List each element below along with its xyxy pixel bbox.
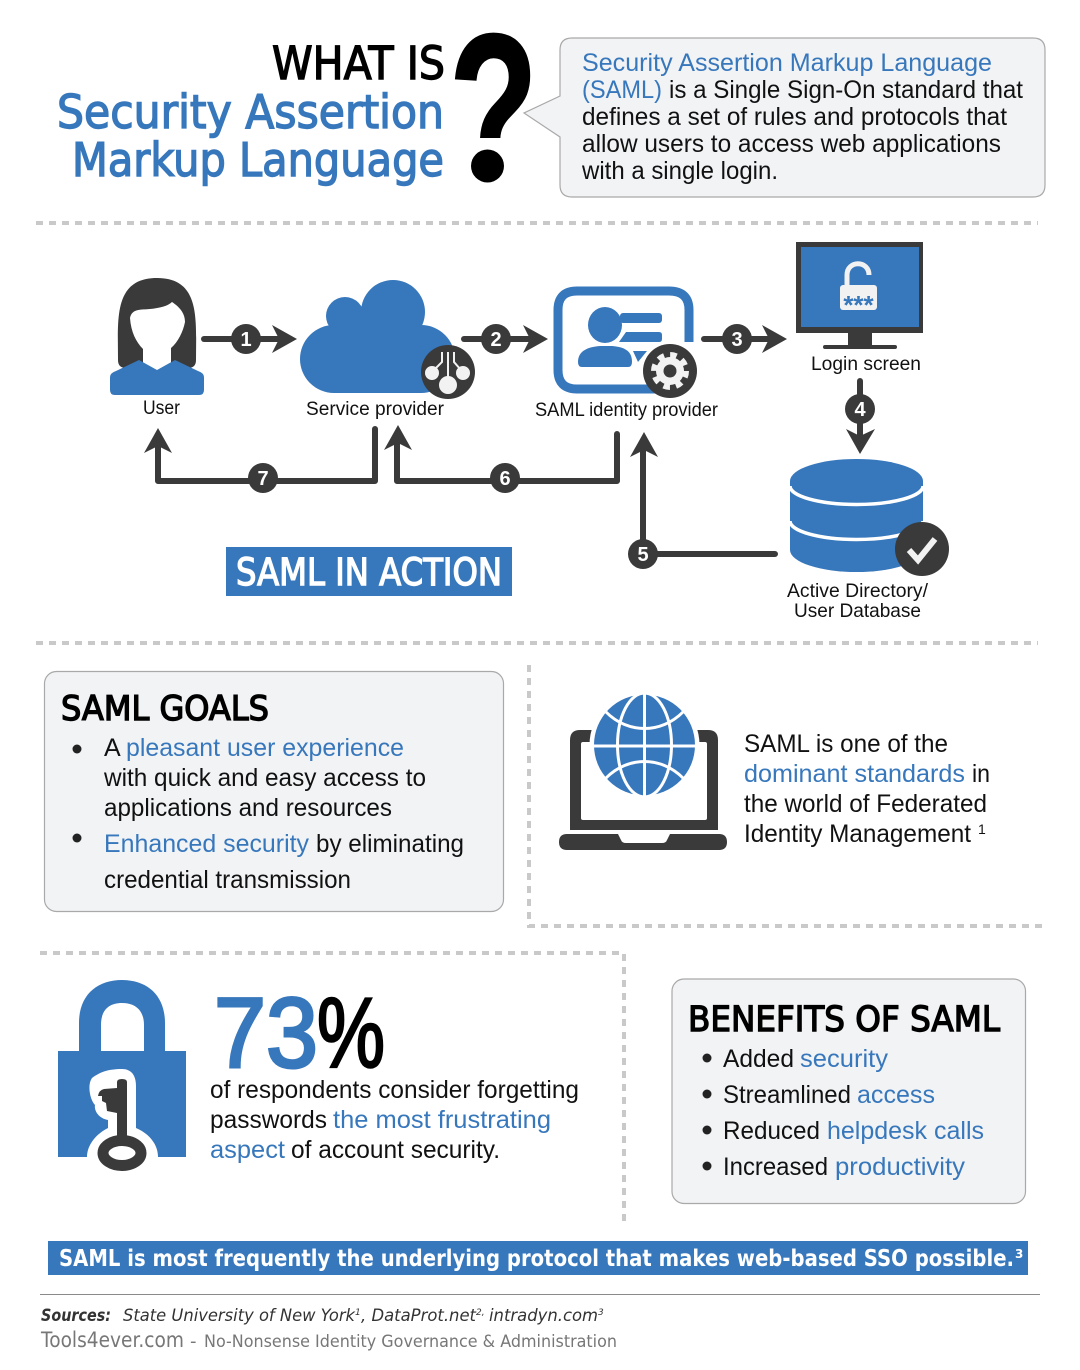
panel: SAML goals: with quick and easy access to — [103, 764, 426, 792]
arrow 5: 5 — [637, 544, 649, 566]
arrow 1 — [204, 324, 297, 354]
sources: 3 — [598, 1308, 604, 1318]
icon: login screen monitor: *** — [843, 290, 875, 320]
panel: benefits of SAML: Reduced — [723, 1117, 820, 1145]
title: Security Assertion — [57, 85, 444, 139]
text: dominant standards: SAML is one of the — [744, 730, 948, 758]
text: dominant standards: 1 — [978, 821, 986, 837]
text: dominant standards: the world of Federated — [744, 790, 987, 818]
stat: 73 percent: of respondents consider forgetting — [210, 1076, 579, 1104]
text: dominant standards — [744, 730, 990, 848]
arrow 3 — [704, 324, 787, 354]
arrow 7 — [144, 428, 375, 493]
heading: SAML in action: SAML IN ACTION — [236, 551, 502, 594]
icon: user database — [790, 459, 949, 576]
title: Markup Language — [72, 133, 444, 187]
label: Active Directory / User Database: User Database — [794, 600, 921, 622]
banner: SSO takeaway: 3 — [1015, 1247, 1023, 1261]
stat: 73 percent — [210, 977, 579, 1164]
sources: intradyn.com — [489, 1306, 598, 1326]
text: dominant standards: dominant standards — [744, 760, 965, 788]
panel: SAML goals: Enhanced security — [104, 830, 309, 858]
callout: SAML definition: (SAML) — [582, 76, 662, 104]
stat: 73 percent: the most frustrating — [333, 1106, 551, 1134]
footer: Tools4ever tagline — [40, 1328, 617, 1352]
arrow 2: 2 — [490, 329, 502, 351]
footer: Tools4ever tagline: - — [190, 1331, 196, 1352]
icon: login screen monitor — [796, 242, 923, 349]
sources — [41, 1306, 604, 1326]
sources: 1 — [355, 1308, 361, 1318]
panel: benefits of SAML: Added — [723, 1045, 794, 1073]
label: Active Directory / User Database — [787, 580, 929, 622]
panel: SAML goals: applications and resources — [104, 794, 392, 822]
panel: benefits of SAML: security — [800, 1045, 889, 1073]
panel: SAML goals: credential transmission — [104, 866, 351, 894]
arrow 2 — [464, 324, 548, 354]
sources: 2, — [476, 1308, 485, 1318]
callout: SAML definition: Security Assertion Markup Language — [582, 49, 992, 77]
icon: service provider cloud — [300, 280, 475, 399]
icon: laptop with globe — [559, 690, 727, 850]
stat: 73 percent: 73 — [214, 977, 318, 1088]
callout: SAML definition: with a single login. — [581, 157, 778, 185]
arrow 4 — [845, 381, 875, 454]
arrow 1: 1 — [240, 329, 252, 351]
footer: Tools4ever tagline: Tools4ever.com — [40, 1328, 184, 1352]
stat: 73 percent: of account security. — [291, 1136, 500, 1164]
callout: SAML definition — [524, 38, 1045, 197]
callout: SAML definition: is a Single Sign-On standard that — [669, 76, 1023, 104]
panel: SAML goals: SAML GOALS — [61, 689, 269, 729]
sources: State University of New York — [123, 1306, 356, 1326]
label: Active Directory / User Database: Active Directory/ — [787, 580, 929, 602]
label: User: User — [143, 397, 180, 419]
icon: user — [110, 278, 204, 395]
panel: benefits of SAML — [672, 979, 1026, 1204]
arrow 6: 6 — [499, 468, 511, 490]
sources: Sources: — [41, 1306, 111, 1326]
text: dominant standards: Identity Management — [744, 820, 971, 848]
arrow 3: 3 — [731, 329, 743, 351]
stat: 73 percent: % — [317, 977, 385, 1088]
icon: padlock with key — [58, 980, 186, 1166]
callout: SAML definition: defines a set of rules and protocols that — [582, 103, 1007, 131]
panel: SAML goals — [44, 672, 504, 912]
label: SAML identity provider: SAML identity provider — [535, 399, 718, 421]
stat: 73 percent: aspect — [210, 1136, 285, 1164]
callout: SAML definition: allow users to access web applications — [582, 130, 1001, 158]
panel: SAML goals: by eliminating — [316, 830, 464, 858]
arrow 6 — [384, 425, 617, 493]
arrow 7: 7 — [257, 468, 269, 490]
label: Login screen: Login screen — [811, 353, 921, 375]
icon: SAML identity provider card — [558, 291, 697, 398]
panel: benefits of SAML: helpdesk calls — [827, 1117, 984, 1145]
stat: 73 percent: passwords — [210, 1106, 327, 1134]
arrow 4: 4 — [854, 399, 866, 421]
sources: , DataProt.net — [361, 1306, 477, 1326]
arrow 5 — [628, 432, 775, 569]
title: WHAT IS — [272, 37, 445, 90]
panel: SAML goals: pleasant user experience — [126, 734, 404, 762]
text: dominant standards: in — [972, 760, 990, 788]
title — [57, 37, 445, 187]
panel: benefits of SAML: Streamlined — [723, 1081, 851, 1109]
footer: Tools4ever tagline: No-Nonsense Identity Governance & Administration — [204, 1332, 617, 1352]
label: Service provider: Service provider — [306, 398, 444, 420]
panel: SAML goals: A — [104, 734, 121, 762]
panel: benefits of SAML: Increased — [723, 1153, 828, 1181]
panel: benefits of SAML: productivity — [835, 1153, 966, 1181]
panel: benefits of SAML: BENEFITS OF SAML — [688, 1000, 1000, 1040]
panel: benefits of SAML: access — [857, 1081, 935, 1109]
